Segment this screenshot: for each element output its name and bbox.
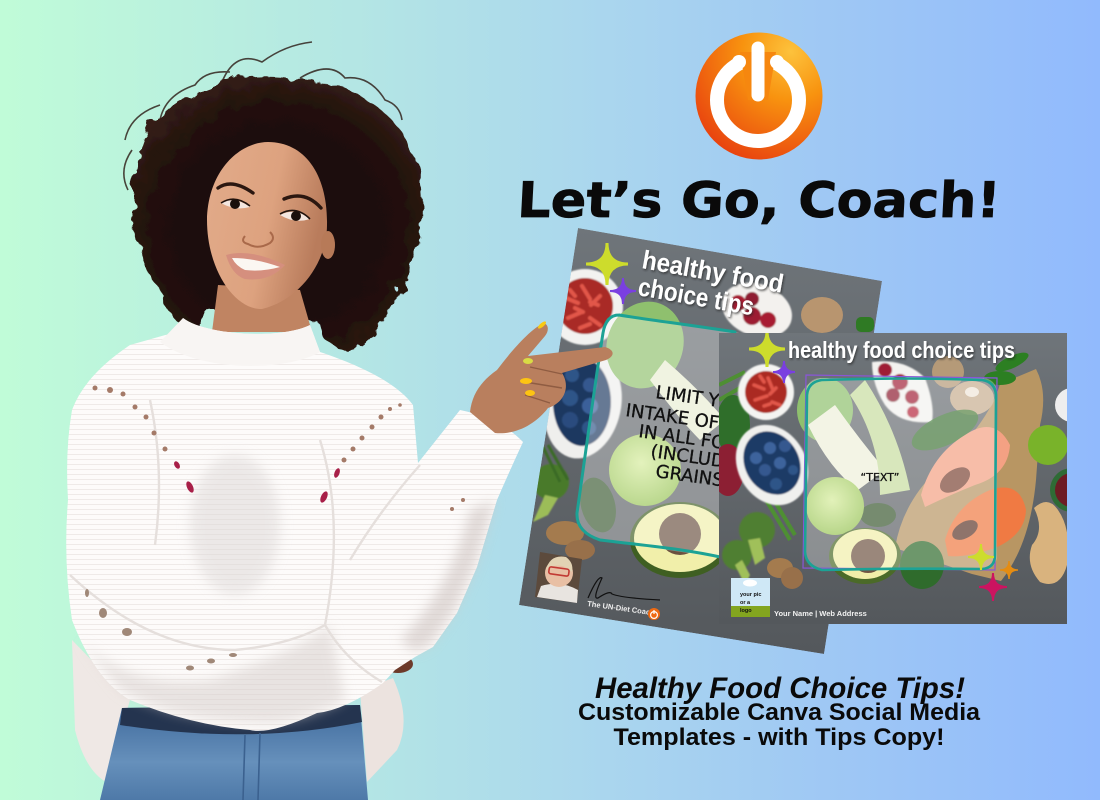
logo placeholder bbox=[731, 578, 770, 617]
handwritten tip text: IN ALL FO bbox=[637, 421, 726, 454]
walnuts bbox=[767, 558, 803, 589]
fingernails bbox=[537, 320, 547, 330]
blueberry bowl bbox=[734, 424, 809, 506]
teal outline bbox=[577, 315, 735, 558]
herbs bbox=[912, 410, 978, 450]
blueberry bowl bbox=[546, 359, 623, 460]
sparkle lime bbox=[749, 331, 785, 367]
avocado bbox=[829, 528, 901, 584]
cherries bowl bbox=[721, 282, 793, 333]
salmon steak bottom bbox=[945, 488, 1026, 556]
red sweater holes bbox=[173, 460, 341, 504]
handwritten tip text: (INCLUDI bbox=[649, 441, 731, 473]
kidney beans bowl bbox=[1050, 468, 1067, 512]
signature bbox=[588, 578, 660, 600]
footer name: Your Name | Web Address bbox=[774, 609, 867, 618]
green pepper bbox=[856, 317, 874, 332]
caption line 2: Templates - with Tips Copy! bbox=[614, 724, 944, 751]
ginger bbox=[1030, 502, 1068, 584]
sweater holes lower bbox=[85, 589, 237, 670]
placeholder text: “TEXT” bbox=[861, 471, 899, 484]
caption heading: Healthy Food Choice Tips! bbox=[595, 672, 965, 705]
apple bbox=[609, 434, 681, 506]
sweater holes left bbox=[92, 386, 168, 452]
parsley bbox=[900, 541, 944, 589]
teal outline bbox=[805, 378, 996, 570]
face bbox=[207, 142, 327, 309]
caption bbox=[578, 672, 980, 751]
coach portrait bbox=[535, 552, 582, 603]
front card title: healthy food choice tips bbox=[788, 337, 1015, 363]
mushrooms bbox=[932, 356, 994, 415]
salmon steak top bbox=[921, 427, 1010, 507]
sparkle orange bbox=[1000, 561, 1018, 579]
collar ribbing bbox=[160, 318, 320, 366]
nose bbox=[243, 232, 273, 247]
woman figure bbox=[66, 42, 613, 800]
broccoli bbox=[533, 445, 569, 522]
cherries bowl bbox=[872, 361, 933, 422]
frosted text panel bbox=[577, 315, 740, 558]
goji berry bowl bbox=[738, 364, 794, 420]
fold lines bbox=[70, 400, 420, 682]
hidden hand under sleeve bbox=[383, 655, 413, 673]
herbs left bbox=[719, 395, 750, 449]
title: Let's Go, Coach!: Let’s Go, Coach! bbox=[516, 171, 1002, 229]
hair bbox=[134, 76, 422, 350]
bok choy bbox=[797, 378, 910, 495]
sparkle lime small bbox=[968, 544, 994, 570]
handwritten tip text bbox=[626, 385, 719, 486]
sparkle purple bbox=[610, 278, 636, 304]
avocado bbox=[630, 502, 719, 578]
broccoli bbox=[722, 512, 775, 585]
small power icon bbox=[648, 608, 660, 620]
sparkle crimson bbox=[979, 573, 1007, 601]
forearm shading bbox=[400, 500, 495, 652]
logo placeholder: logo bbox=[740, 608, 752, 614]
pomegranate bbox=[719, 444, 742, 496]
lower band shading bbox=[80, 625, 345, 723]
eyes bbox=[221, 199, 310, 221]
template card: front template bbox=[712, 331, 1094, 624]
bok choy bbox=[606, 302, 719, 440]
apple bbox=[806, 477, 864, 535]
ear bbox=[321, 231, 335, 259]
logo placeholder: or a bbox=[740, 600, 751, 606]
chili peppers bbox=[984, 352, 1028, 385]
sweater holes right bbox=[342, 403, 465, 511]
mouth bbox=[226, 253, 285, 279]
bowl right bbox=[1055, 388, 1067, 422]
back card title: healthy food bbox=[640, 244, 786, 299]
back card title bbox=[638, 250, 786, 320]
mushroom bbox=[801, 297, 843, 333]
leafy greens bbox=[860, 503, 896, 527]
logo: power button icon bbox=[696, 32, 822, 160]
coach name: The UN-Diet Coach bbox=[587, 599, 656, 617]
wooden board bbox=[895, 369, 1043, 581]
green beans bbox=[719, 372, 795, 540]
caption line 1: Customizable Canva Social Media bbox=[578, 699, 980, 726]
sweater bbox=[66, 318, 523, 731]
handwritten tip text: LIMIT Y bbox=[654, 382, 721, 412]
sweater back panels bbox=[72, 640, 404, 782]
walnuts bbox=[546, 521, 595, 560]
hand pointing bbox=[470, 320, 613, 433]
hair wisps bbox=[124, 42, 402, 190]
goji berry bowl bbox=[561, 268, 624, 346]
lime bbox=[1028, 425, 1068, 465]
chest shading bbox=[190, 455, 280, 595]
template card: rotated back template bbox=[519, 228, 882, 654]
neck bbox=[212, 285, 312, 332]
jeans bbox=[100, 705, 368, 800]
handwritten tip text: GRAINS bbox=[654, 461, 725, 491]
back card title: choice tips bbox=[636, 271, 756, 321]
handwritten tip text: INTAKE OF bbox=[624, 400, 720, 434]
eyebrows bbox=[218, 184, 321, 208]
sparkle purple bbox=[773, 361, 795, 383]
sparkle lime bbox=[586, 243, 628, 285]
dark greens bbox=[580, 478, 616, 532]
logo placeholder: your pic bbox=[740, 592, 761, 598]
frosted text panel bbox=[806, 378, 997, 570]
purple template frame bbox=[803, 375, 997, 570]
